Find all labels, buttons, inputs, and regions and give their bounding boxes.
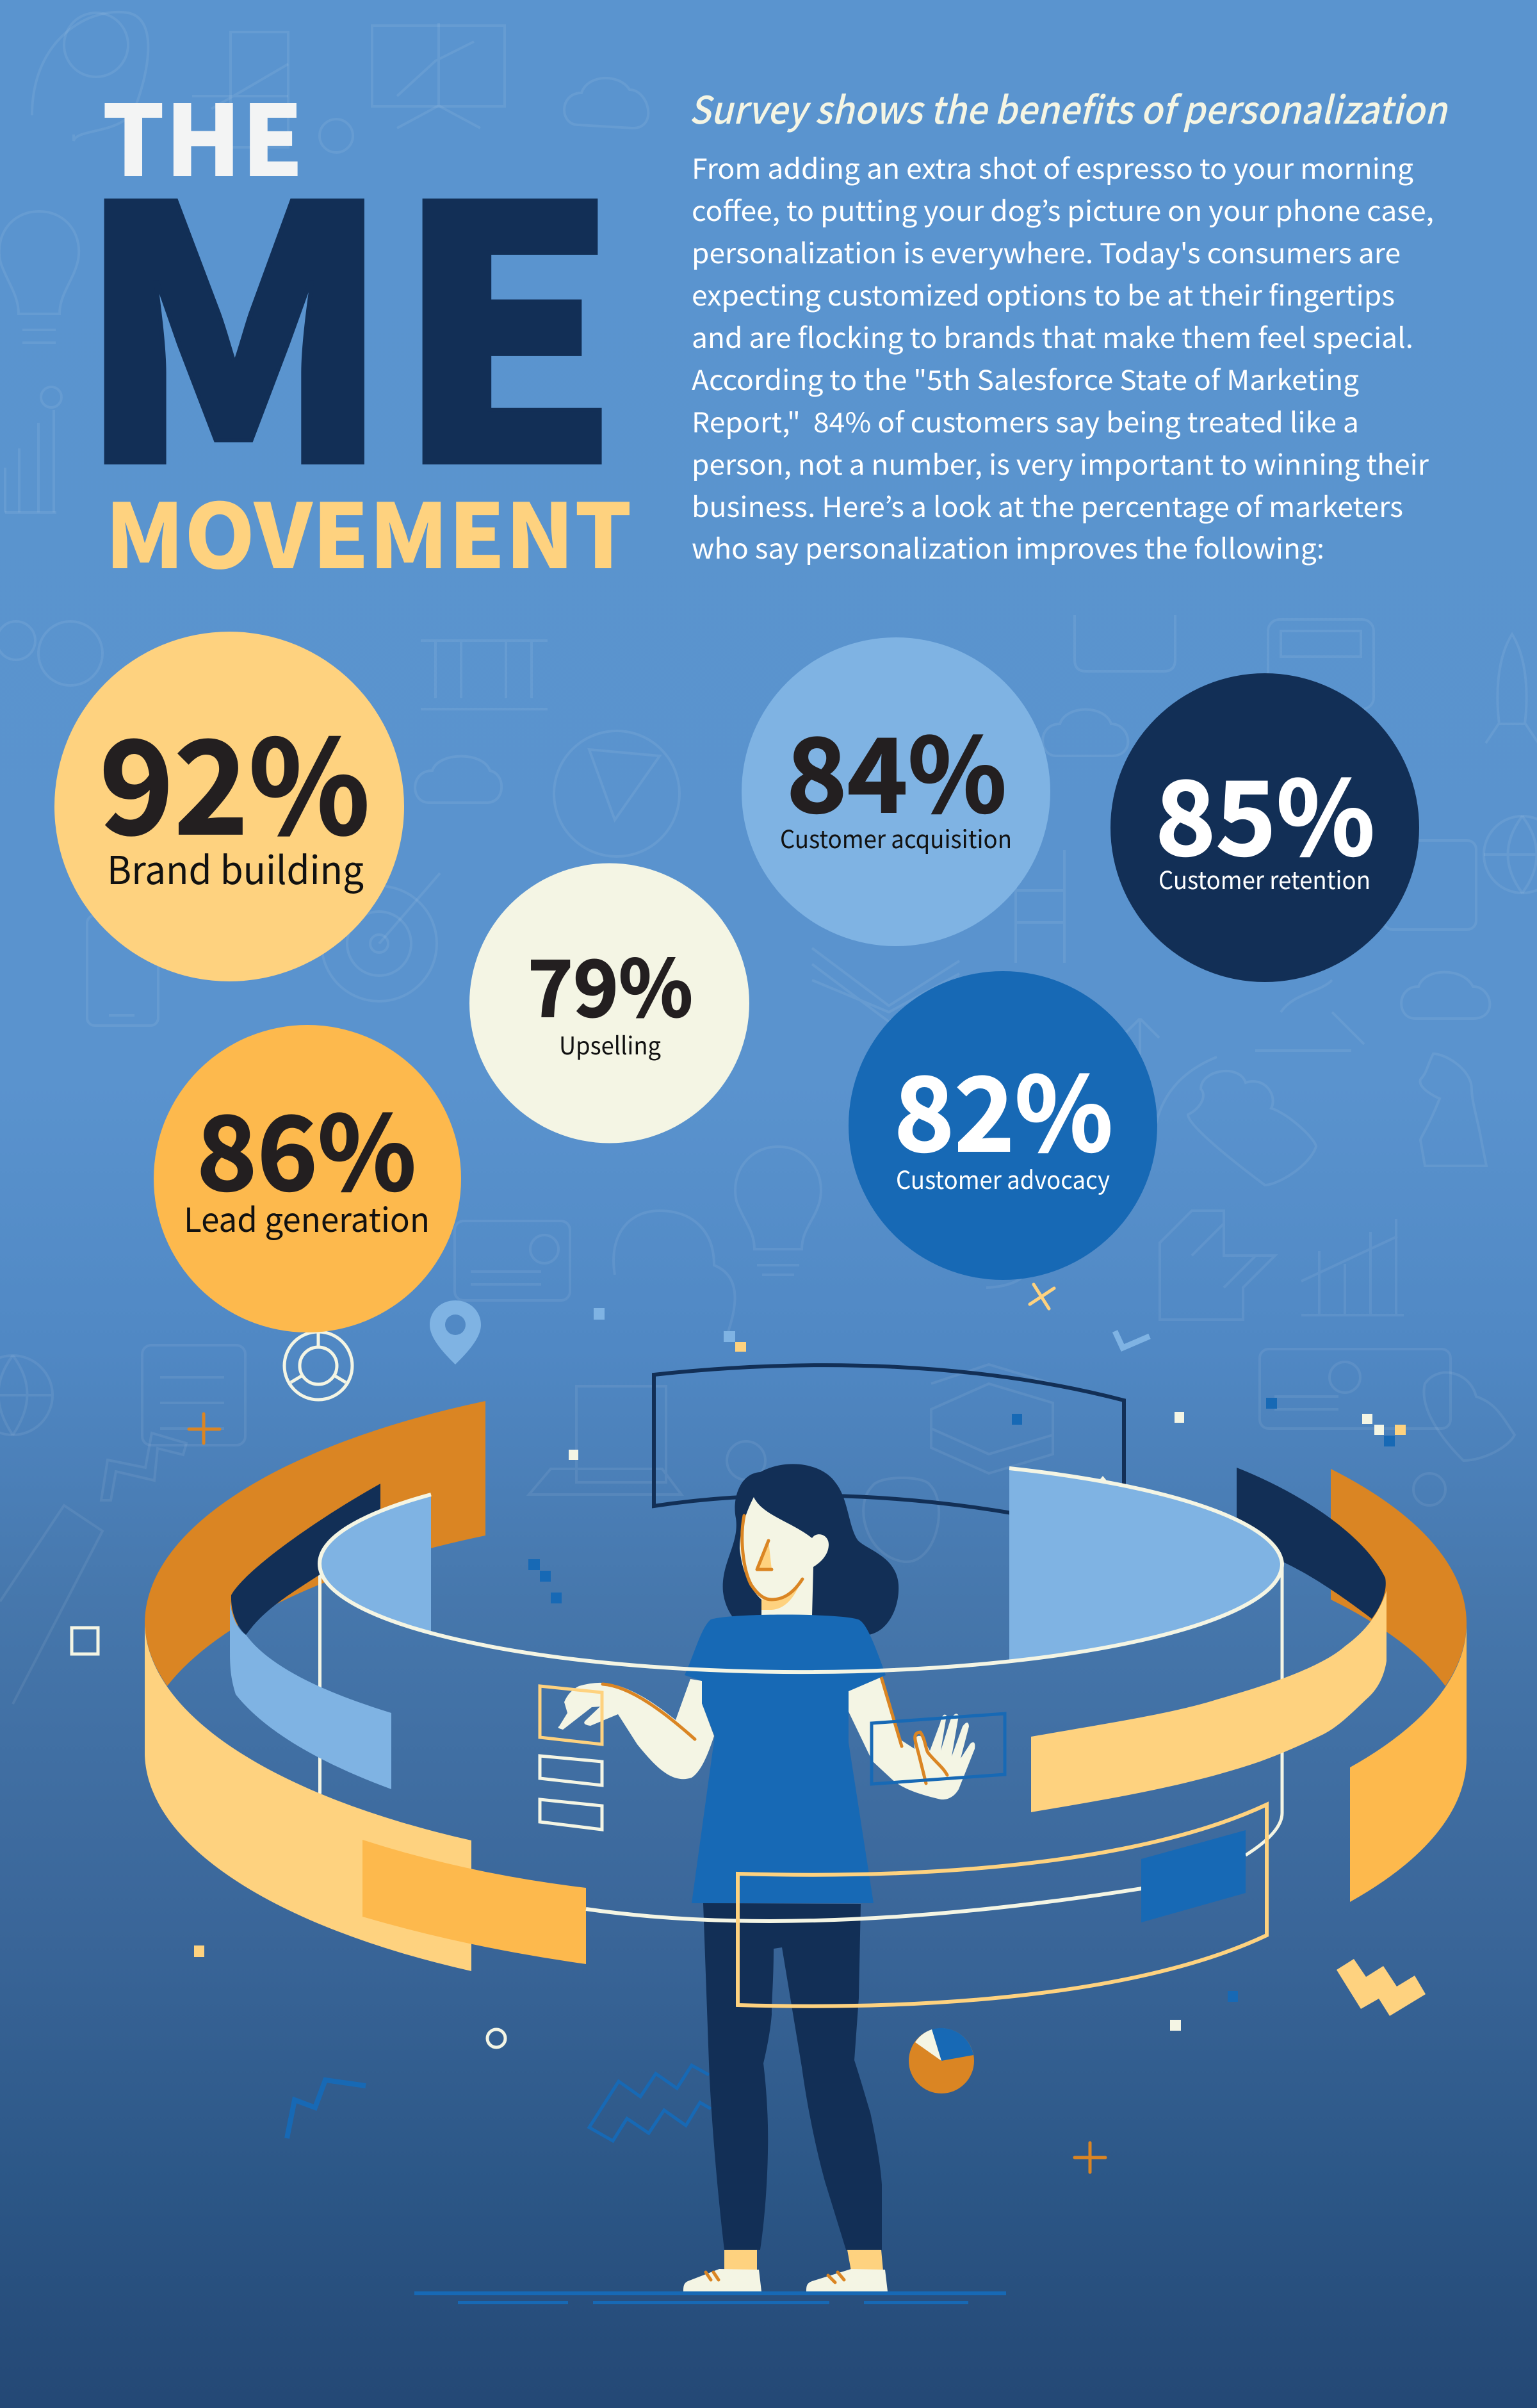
intro paragraph: and are flocking to brands that make them feel special. [692, 316, 1413, 356]
stat bubble: 84% customer acquisition [742, 637, 1050, 946]
yellow outlined panel [738, 1805, 1267, 2006]
stat bubble: 82% customer advocacy: 82% [894, 1033, 1113, 1181]
intro paragraph: who say personalization improves the following: [692, 527, 1324, 567]
blue hand frame [872, 1714, 1005, 1784]
icon: outlined square [72, 1628, 98, 1654]
stat bubble: 85% customer retention [1110, 673, 1419, 982]
left back band orange [145, 1401, 485, 1686]
ground lines [414, 2291, 1006, 2304]
navy outlined back screen [654, 1365, 1124, 1513]
left arm orange line [603, 1684, 695, 1739]
intro paragraph: coffee, to putting your dog’s picture on your phone case, [692, 190, 1434, 229]
icon: white circle outline [487, 2029, 505, 2047]
intro paragraph: expecting customized options to be at their fingertips [692, 274, 1395, 314]
white cylinder vertical edges [320, 1564, 1282, 1855]
floating decorative shapes [72, 1284, 1426, 2172]
stat bubble: 79% upselling: Upselling [559, 1026, 661, 1061]
icon: blue squiggle [287, 2080, 366, 2138]
white menu box two [540, 1799, 602, 1830]
nose [757, 1541, 772, 1569]
yellow menu box [540, 1686, 602, 1744]
right arm and open hand [849, 1677, 975, 1799]
illustration: woman figure [558, 1464, 975, 2291]
white menu box one [540, 1756, 602, 1785]
stat bubble: 84% customer acquisition: Customer acquisition [780, 820, 1012, 856]
icon: yellow x mark [1030, 1284, 1054, 1309]
neck shadow [761, 1582, 801, 1610]
front left light blue band [230, 1601, 391, 1789]
icon: orange plus left [189, 1414, 220, 1443]
inner left light blue panel [320, 1495, 431, 1633]
icon: orange plus right [1075, 2143, 1105, 2172]
white lower rim [586, 1888, 1142, 1921]
title word: ME: ME [75, 55, 622, 564]
stat bubble: 86% lead generation: Lead generation [184, 1193, 430, 1241]
face contour line [742, 1516, 802, 1600]
shoes [683, 2269, 888, 2291]
intro paragraph: person, not a number, is very important to winning their [692, 443, 1429, 483]
stat bubble: 85% customer retention: Customer retention [1159, 861, 1370, 897]
stat bubble: 84% customer acquisition: 84% [786, 694, 1007, 842]
intro paragraph [692, 147, 1434, 567]
stat bubble: 92% brand building: Brand building [107, 840, 364, 896]
stat bubble: 92% brand building [54, 632, 404, 981]
stat bubble: 85% customer retention: 85% [1155, 737, 1375, 885]
trousers [703, 1903, 882, 2250]
right arm orange lines [881, 1677, 947, 1783]
hair [723, 1464, 899, 1635]
intro paragraph: From adding an extra shot of espresso to your morning [692, 147, 1413, 187]
stat bubble: 79% upselling [469, 864, 749, 1143]
blue block on rim [1141, 1830, 1246, 1922]
left navy crescent [231, 1484, 380, 1635]
title word: MOVEMENT: MOVEMENT [105, 466, 632, 594]
icon: donut chart outline [284, 1332, 352, 1400]
socks [724, 2250, 883, 2271]
right navy crescent [1237, 1468, 1386, 1619]
stat bubble: 82% customer advocacy: Customer advocacy [896, 1161, 1110, 1197]
right back band orange [1331, 1469, 1467, 1686]
stat bubble: 92% brand building: 92% [99, 685, 370, 872]
front right yellow band [1350, 1623, 1467, 1902]
shirt [685, 1614, 886, 1903]
stat bubble: 82% customer advocacy [849, 971, 1157, 1280]
stat bubble: 86% lead generation [154, 1025, 461, 1332]
icon: light blue check mark [1115, 1331, 1150, 1348]
title [75, 55, 632, 594]
inner right light blue panel [1009, 1468, 1282, 1661]
small squares [194, 1308, 1406, 2031]
front left yellow block [362, 1840, 586, 1964]
white ellipse top arc segments and bottom rim [320, 1468, 1282, 1672]
shoelaces [706, 2272, 844, 2282]
intro heading: Survey shows the benefits of personalization [689, 80, 1449, 135]
intro paragraph: Report," 84% of customers say being treated like a [692, 401, 1359, 441]
intro paragraph: According to the "5th Salesforce State of Marketing [692, 359, 1359, 398]
icon: blue zigzag outline [589, 2065, 711, 2141]
intro paragraph: business. Here’s a look at the percentage of marketers [692, 486, 1403, 525]
illustration: holographic rings behind the figure [145, 1365, 1467, 1971]
intro paragraph: personalization is everywhere. Today's consumers are [692, 232, 1401, 272]
icon: yellow zigzag [1337, 1959, 1426, 2016]
background pattern of faint line icons [0, 12, 1537, 1704]
pie chart icon [909, 2028, 974, 2093]
illustration: front interface lines and panels [320, 1468, 1282, 2006]
front right cream band [1031, 1591, 1387, 1812]
icon: map pin [430, 1300, 481, 1364]
front left cream band [145, 1623, 471, 1971]
stat bubble: 86% lead generation: 86% [197, 1072, 416, 1220]
face and neck [740, 1497, 829, 1616]
title word: THE: THE [102, 63, 304, 205]
tiny cream marker [1096, 1476, 1109, 1484]
left arm and pointing hand [558, 1679, 714, 1779]
stat bubble: 79% upselling: 79% [528, 926, 693, 1040]
